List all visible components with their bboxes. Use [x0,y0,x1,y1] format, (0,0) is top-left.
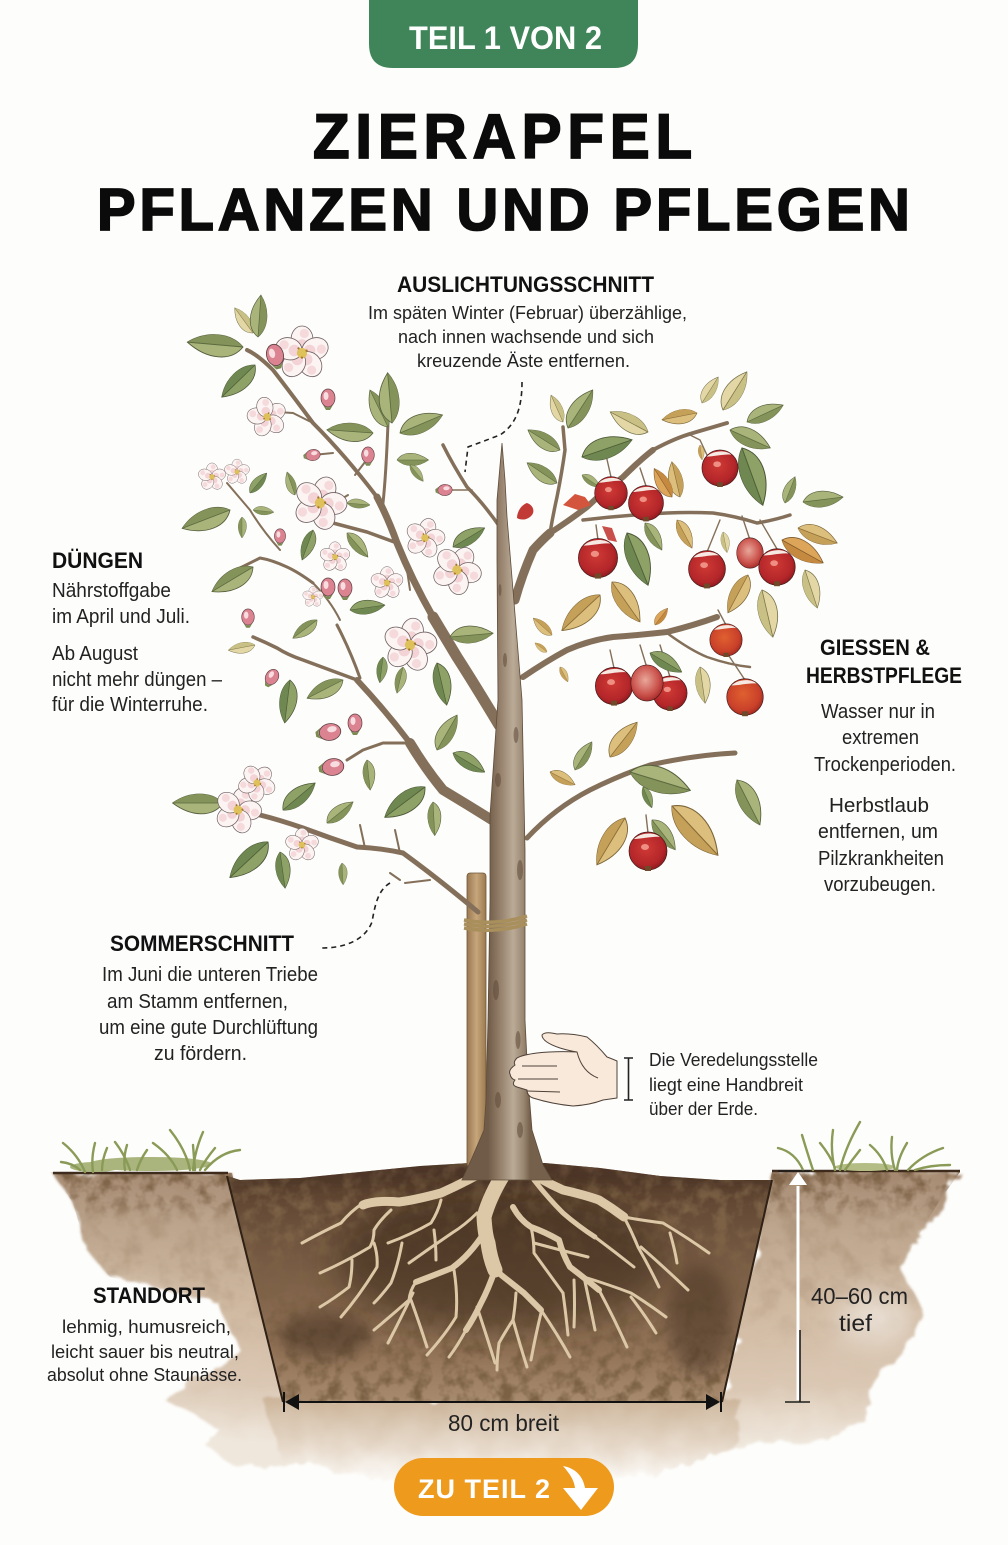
text: graft point [649,1050,818,1119]
outer soil [53,1172,960,1470]
text: fertilising: im April und Juli. [52,606,190,628]
depth label: 40–60 cm [811,1283,908,1309]
text: graft point: Die Veredelungsstelle [649,1050,818,1070]
leaves [173,294,844,889]
branches [227,350,790,912]
button: to part 2 [394,1458,614,1516]
soil cross-section [40,1122,970,1478]
text: thinning cut [368,272,687,371]
thin roots [302,1200,709,1370]
depth label [811,1283,908,1336]
text: summer cut: Im Juni die unteren Triebe [102,964,318,986]
text: watering and autumn care: HERBSTPFLEGE [806,663,962,688]
thick roots [363,1165,495,1205]
text: fertilising: für die Winterruhe. [52,694,208,716]
text: location: lehmig, humusreich, [62,1317,231,1337]
text: graft point: über der Erde. [649,1099,758,1119]
text: watering and autumn care: entfernen, um [818,821,938,843]
text: graft point: liegt eine Handbreit [649,1075,803,1095]
pit mottling [220,1160,780,1410]
badge: part 1 of 2: TEIL 1 VON 2 [409,20,602,56]
title: ZIERAPFEL [313,102,692,172]
rope tie [464,916,527,930]
callout line: thinning cut [465,382,522,472]
text: watering and autumn care: extremen [842,727,919,749]
stake [467,873,486,1167]
text: fertilising: Ab August [52,643,138,665]
text: fertilising: DÜNGEN [52,548,143,573]
text: location: STANDORT [93,1283,206,1308]
planting pit [227,1163,772,1402]
bark marks [493,584,523,1138]
tree [173,294,844,1180]
text: watering and autumn care: Trockenperioden. [814,754,956,776]
text: watering and autumn care: Pilzkrankheiten [818,848,944,870]
roots [302,1165,709,1370]
badge: part 1 of 2 [369,0,638,68]
text: summer cut: zu fördern. [154,1043,247,1065]
text: thinning cut: kreuzende Äste entfernen. [417,351,630,371]
text: fertilising: nicht mehr düngen – [52,669,223,691]
text: thinning cut: AUSLICHTUNGSSCHNITT [397,272,655,297]
text: thinning cut: Im späten Winter (Februar) überzählige, [368,303,687,323]
text: fertilising [52,548,223,716]
width label: 80 cm breit [448,1410,560,1436]
trunk [462,443,552,1180]
depth arrow [778,1171,810,1402]
pit edges [227,1176,772,1402]
text: thinning cut: nach innen wachsende und sich [398,327,654,347]
text: location: leicht sauer bis neutral, [51,1342,239,1362]
text: watering and autumn care: GIESSEN & [820,635,930,660]
width arrow [284,1392,721,1412]
text halo: location [50,1298,200,1382]
depth label: tief [839,1310,873,1336]
callout line: summer cut [322,883,390,948]
blossoms [197,326,617,863]
text: summer cut: am Stamm entfernen, [107,991,288,1013]
text: summer cut: SOMMERSCHNITT [110,931,295,956]
title [97,102,910,243]
title: PFLANZEN UND PFLEGEN [97,177,910,243]
soil top line [53,1171,960,1173]
text: watering and autumn care [806,635,962,896]
text: fertilising: Nährstoffgabe [52,580,171,602]
text: watering and autumn care: vorzubeugen. [824,874,936,896]
text: location: absolut ohne Staunässe. [47,1365,242,1385]
text: location [47,1283,242,1385]
button: to part 2: ZU TEIL 2 [418,1474,550,1504]
grass left [61,1130,240,1172]
soil below pit [262,1398,740,1478]
icon: curved arrow [563,1466,598,1510]
text: summer cut [99,931,318,1065]
text: summer cut: um eine gute Durchlüftung [99,1017,318,1039]
soil mottling [54,1172,960,1316]
icon: hand [510,1033,617,1106]
text: watering and autumn care: Wasser nur in [821,701,935,723]
text halo: depth [837,1294,913,1342]
text: watering and autumn care: Herbstlaub [829,795,929,817]
grass right [778,1122,950,1171]
apples [578,450,795,871]
bracket: hand width [624,1058,633,1100]
